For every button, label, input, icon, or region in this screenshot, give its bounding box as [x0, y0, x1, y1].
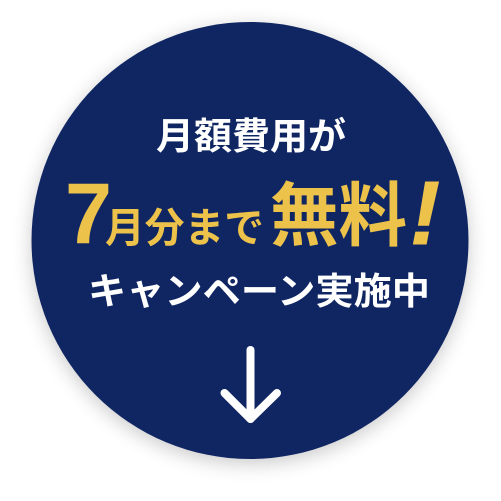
- circle shadow: [32, 27, 468, 463]
- heading: monthly fee: 月額費用が: [156, 116, 346, 157]
- campaign text: キャンペーン実施中: [88, 271, 430, 312]
- headline: free until month 7: [65, 164, 440, 264]
- numeral 7: 7: [65, 166, 112, 262]
- free: 無料: [270, 177, 407, 255]
- icon: down arrow: [224, 350, 277, 419]
- navy circle: [32, 22, 468, 459]
- until month: 月分まで: [105, 205, 264, 251]
- exclamation mark: !: [410, 164, 440, 264]
